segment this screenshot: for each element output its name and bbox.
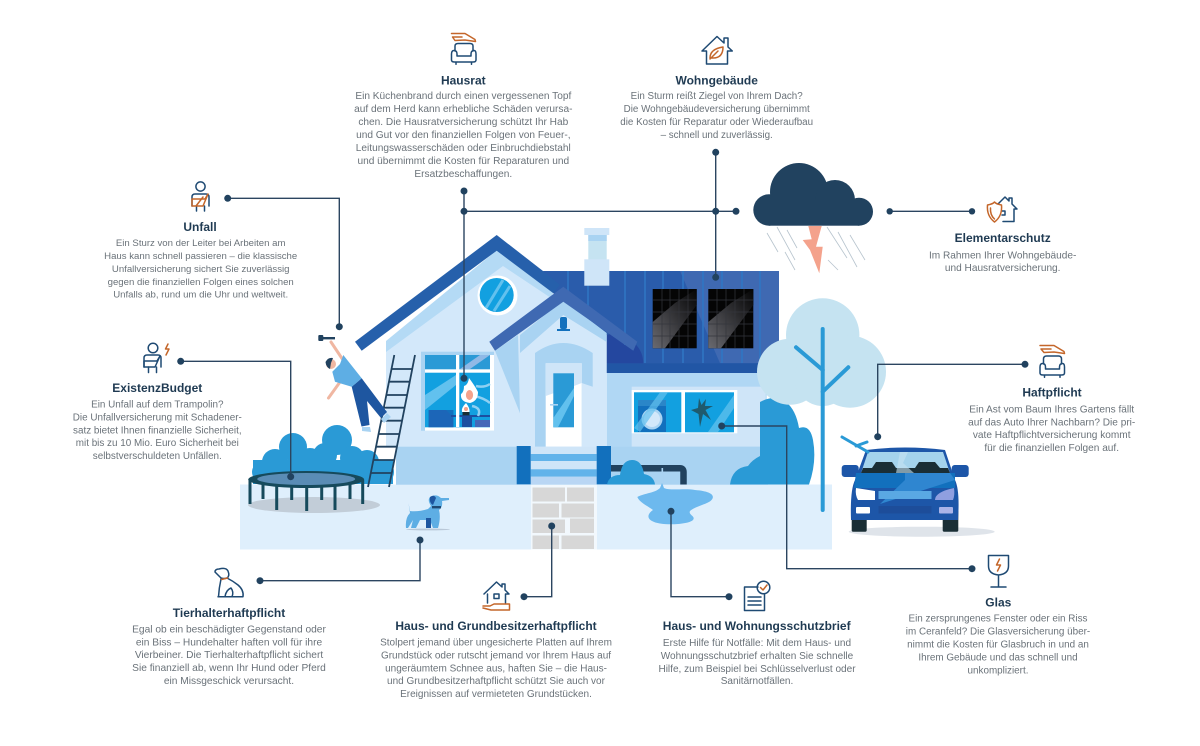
right window with washing machine and broken glass (632, 390, 737, 433)
text block: Ereignissen auf vermieteten Grundstücken. (400, 689, 592, 700)
text block: Ihrem Gebäude und das schnell und (918, 652, 1078, 664)
text block: im Ceranfeld? Die Glasversicherung über- (906, 626, 1090, 638)
text block: Sanitärnotfällen. (721, 676, 793, 687)
text block: Stolpert jemand über ungesicherte Platten auf Ihrem (380, 638, 612, 648)
text block: ein Biss – Hundehalter haften voll für ihre (136, 638, 322, 648)
panel: Unfall (104, 182, 297, 300)
text block: Die Unfallversicherung mit Schadener- (73, 412, 242, 424)
panel: Haus- und Grundbesitzerhaftpflicht (380, 582, 612, 700)
text block: Ein Ast vom Baum Ihres Gartens fällt (969, 404, 1134, 416)
text block: auf dem Herd kann erhebliche Schäden verursa- (354, 104, 572, 115)
text block: Vierbeiner. Die Tierhalterhaftpflicht sichert (135, 650, 323, 661)
falling man (318, 335, 391, 432)
panel: Wohngebäude (620, 36, 813, 141)
text block: Leitungswasserschäden oder Einbruchdiebstahl (356, 143, 571, 154)
connector: Schutzbrief (668, 508, 732, 600)
panel: ExistenzBudget (73, 343, 242, 462)
heading: Tierhalterhaftpflicht (173, 606, 285, 620)
text block: mit bis zu 10 Mio. Euro Sicherheit bei (76, 438, 239, 449)
text block: Ein zersprungenes Fenster oder ein Riss (909, 614, 1088, 624)
fire (461, 378, 478, 415)
text block: auf das Auto Ihrer Nachbarn? Die pri- (968, 418, 1135, 428)
heading: Glas (985, 596, 1012, 610)
text block: Grundstück oder rutscht jemand vor Ihrem Haus auf (381, 650, 611, 662)
left window with kitchen fire (421, 352, 494, 431)
text block: und übernimmt die Kosten für Reparaturen und (357, 156, 569, 167)
stone path (532, 488, 594, 549)
icon: broken glass (988, 556, 1008, 587)
connector: Glas (718, 422, 976, 572)
porch lamp (557, 317, 570, 331)
icon: sitting dog (215, 568, 243, 597)
heading: Haus- und Grundbesitzerhaftpflicht (395, 619, 597, 633)
text block: ein Missgeschick verursacht. (164, 676, 294, 687)
text block: die Kosten für Reparatur oder Wiederaufbau (620, 117, 813, 128)
text block: Ersatzbeschaffungen. (414, 169, 512, 180)
text block: Unfallversicherung sichert Sie zuverlässig (112, 264, 289, 275)
icon: hand over sofa (1040, 346, 1064, 377)
porch (489, 287, 637, 447)
bush by pipe (607, 460, 655, 484)
text block: satz bietet Ihnen finanzielle Sicherheit, (73, 426, 242, 436)
house (355, 228, 779, 485)
icon: shield and house (987, 197, 1017, 222)
heading: Haftpflicht (1022, 386, 1082, 400)
connector: Tierhalterhaftpflicht (256, 536, 424, 584)
walls (386, 250, 768, 485)
text block: Ein Sturz von der Leiter bei Arbeiten am (116, 238, 285, 249)
ladder (368, 355, 415, 487)
text block: Ein Unfall auf dem Trampolin? (91, 400, 224, 410)
heading: Unfall (183, 220, 217, 234)
ground (240, 484, 832, 550)
water puddle (637, 468, 713, 524)
text block: Egal ob ein beschädigter Gegenstand oder (132, 624, 326, 636)
solar panel left (653, 289, 697, 348)
icon: hand over sofa (452, 34, 476, 64)
text block: Im Rahmen Ihrer Wohngebäude- (929, 250, 1076, 262)
text block: und Hausratversicherung. (945, 263, 1060, 274)
text block: – schnell und zuverlässig. (661, 130, 773, 141)
fallen branch (842, 437, 868, 452)
text block: ungeräumtem Schnee aus, haften Sie – die Haus- (385, 664, 607, 674)
blue roof with solar panels (543, 271, 779, 373)
icon: house with leaf (702, 36, 732, 64)
text block: vate Haftpflichtversicherung kommt (973, 430, 1131, 441)
panel: Elementarschutz (929, 197, 1076, 274)
connector lines (177, 149, 1028, 600)
entrance steps (517, 446, 611, 484)
connector: Wohngebäude (712, 149, 719, 281)
connector: Unfall (224, 195, 343, 330)
round window (478, 276, 518, 316)
connector: ExistenzBudget (177, 358, 294, 480)
chimney (584, 228, 609, 286)
connector: Elementarschutz (886, 208, 975, 214)
heading: ExistenzBudget (112, 381, 202, 395)
dog (406, 495, 450, 530)
connector: Haftpflicht (874, 361, 1028, 440)
text block: Wohnungsschutzbrief erhalten Sie schnelle (661, 651, 854, 662)
text block: selbstverschuldeten Unfällen. (93, 451, 222, 462)
text block: Unfalls ab, rund um die Uhr und weltweit. (113, 290, 288, 300)
text block: Ein Sturm reißt Ziegel von Ihrem Dach? (631, 91, 803, 102)
text block: Hilfe, zum Beispiel bei Schlüsselverlust oder (658, 664, 856, 675)
text block: Die Wohngebäudeversicherung übernimmt (624, 104, 810, 115)
panel: Hausrat (354, 34, 572, 180)
heading: Wohngebäude (675, 74, 758, 88)
panel: Tierhalterhaftpflicht (132, 568, 326, 687)
heading: Hausrat (441, 74, 486, 88)
heading: Elementarschutz (955, 231, 1051, 245)
panel: Haus- und Wohnungsschutzbrief (658, 581, 856, 687)
text block: und Gut vor den finanziellen Folgen von Feuer-, (356, 130, 571, 141)
solar panel right (708, 289, 753, 348)
icon: person with sling and lightning (144, 343, 169, 372)
text block: und Grundbesitzerhaftpflicht schützt Sie auch vor (387, 676, 606, 687)
icon: person with sling (192, 182, 209, 211)
text block: Erste Hilfe für Notfälle: Mit dem Haus- und (663, 638, 851, 649)
rain (767, 227, 865, 270)
icon: house on hand (483, 582, 510, 610)
connector: Hausrat to Wohngebäude and cloud (460, 208, 740, 215)
text block: gegen die finanziellen Folgen eines solchen (108, 277, 294, 288)
text block: nimmt die Kosten für Glasbruch in und an (907, 640, 1089, 650)
icon: document with check (744, 581, 770, 610)
water pipe (611, 468, 684, 484)
car (842, 437, 995, 537)
storm cloud (753, 163, 873, 273)
connector: Grundbesitzerhaftpflicht (520, 522, 555, 600)
door (546, 363, 582, 447)
connector: Hausrat (460, 188, 468, 382)
text block: Sie finanziell ab, wenn Ihr Hund oder Pferd (132, 663, 326, 674)
text block: Ein Küchenbrand durch einen vergessenen Topf (355, 91, 571, 102)
gable roof (355, 235, 560, 351)
panel: Glas (906, 556, 1090, 676)
text block: Haus kann schnell passieren – die klassische (104, 251, 297, 262)
panel: Haftpflicht (968, 346, 1135, 454)
trampoline and bushes (248, 425, 394, 513)
porch gable roof (489, 287, 637, 351)
tree and bush (730, 298, 886, 510)
text block: chen. Die Hausratversicherung schützt Ihr Hab (358, 117, 569, 128)
text block: unkompliziert. (968, 666, 1028, 676)
text block: für die finanziellen Folgen auf. (984, 443, 1119, 454)
heading: Haus- und Wohnungsschutzbrief (663, 619, 852, 633)
lightning (803, 226, 823, 273)
